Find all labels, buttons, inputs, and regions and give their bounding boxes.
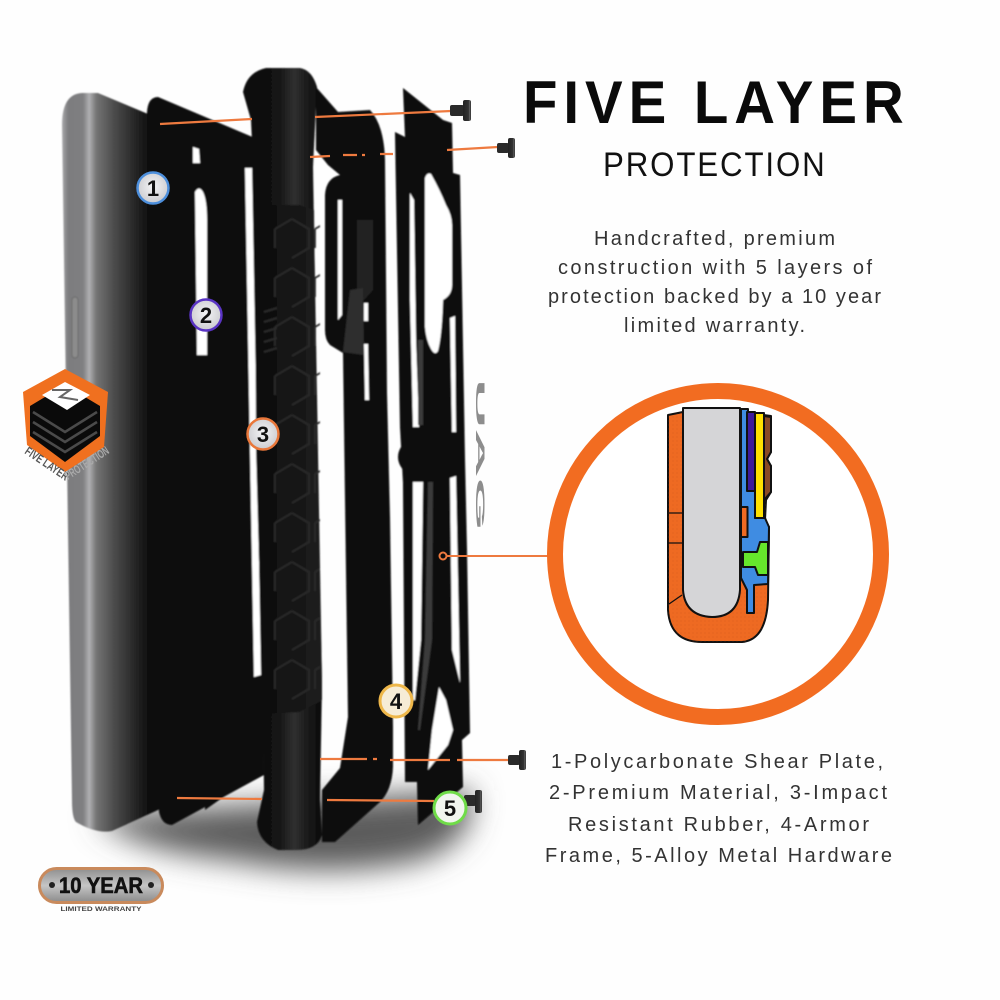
badge 1: 1: [147, 176, 159, 201]
drop shadow under case: [95, 790, 471, 870]
frame slots: [338, 200, 369, 400]
orange assembly lines: [160, 111, 508, 801]
alloy plate openings: [410, 174, 460, 770]
exploded case illustration: [62, 68, 470, 850]
description: construction with 5 layers of: [558, 257, 872, 279]
badge 3: 3: [257, 422, 269, 447]
badge 4: 4: [390, 689, 403, 714]
screw top 1: [450, 100, 471, 121]
frame center gloss: [357, 220, 373, 300]
badge 5: 5: [444, 796, 456, 821]
outer rubber: [668, 412, 771, 642]
badge caption: FIVE LAYER: [22, 444, 72, 484]
layer list: Frame, 5-Alloy Metal Hardware: [545, 845, 892, 867]
rib lines: [669, 513, 682, 604]
layer 4 armor frame: [316, 87, 393, 842]
hex pattern: [272, 218, 320, 708]
green hardware: [743, 542, 768, 575]
cross-section diagram: [668, 408, 771, 642]
badge 2: [190, 300, 222, 330]
phone body: [62, 93, 180, 832]
tag text: 10 YEAR: [59, 873, 143, 898]
small orange insert: [741, 507, 748, 537]
screw bottom 1: [508, 750, 526, 770]
bumper hex grip: [255, 205, 322, 714]
description: protection backed by a 10 year: [548, 286, 881, 308]
10 year warranty tag: [40, 868, 162, 913]
description: limited warranty.: [624, 315, 805, 337]
badge 3: [248, 418, 278, 450]
layer 1 shear plate: [147, 97, 264, 825]
layer 5 alloy plate: [395, 88, 470, 825]
top layer: [42, 382, 90, 410]
tag plate: [40, 868, 162, 902]
layer 3 bumper: [243, 68, 322, 850]
title: FIVE LAYER: [523, 69, 904, 136]
callout leader line: [440, 552, 548, 560]
UAG vertical logo: UAG: [473, 379, 487, 531]
purple layer: [747, 412, 755, 491]
layer list: 1-Polycarbonate Shear Plate,: [551, 751, 883, 773]
badge 1: [138, 172, 168, 204]
description: Handcrafted, premium: [594, 228, 835, 250]
layer stack: [30, 385, 100, 462]
grip hatch mark: [264, 308, 277, 352]
layer 2 premium material: [205, 150, 262, 810]
layer list: 2-Premium Material, 3-Impact: [549, 782, 887, 804]
plate slots: [193, 147, 261, 677]
badge 4: [380, 685, 412, 717]
screw bottom 2: [464, 790, 482, 813]
screw top 2: [497, 138, 515, 158]
layer list: Resistant Rubber, 4-Armor: [568, 814, 869, 836]
hexagon: [23, 369, 108, 472]
blue polycarbonate: [741, 409, 769, 613]
callout circle: [555, 391, 881, 717]
subtitle: PROTECTION: [603, 145, 825, 183]
alloy plate gloss: [418, 340, 433, 730]
grey phone: [683, 408, 740, 617]
layer list: [545, 751, 892, 867]
alloy plate hub: [398, 433, 464, 481]
yellow layer: [755, 413, 764, 518]
badge 5: [434, 792, 466, 824]
10 year warranty tag: LIMITED WARRANTY: [60, 906, 142, 913]
rubber texture: [668, 412, 771, 642]
badge 2: 2: [200, 303, 212, 328]
five layer protection hexagon badge: PROTECTION: [62, 444, 112, 483]
five layer protection hexagon badge: [22, 369, 112, 484]
phone side button: [72, 297, 78, 358]
description: [548, 228, 881, 337]
brown layer: [764, 416, 771, 500]
